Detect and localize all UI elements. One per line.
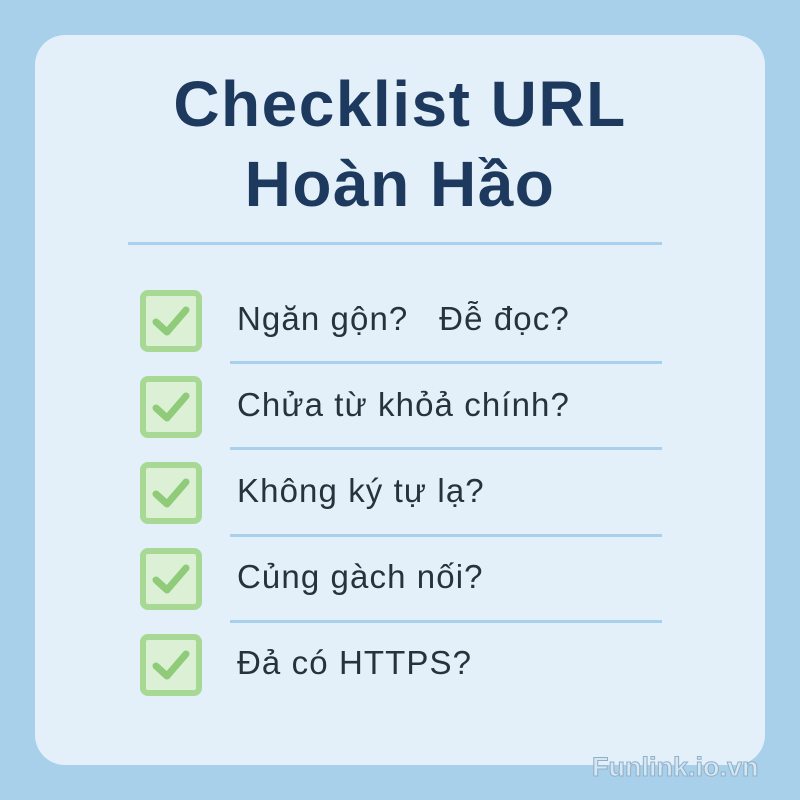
title: Hoàn Hầo (245, 148, 555, 220)
item 2: Chửa từ khỏả chính? (237, 386, 570, 423)
item 3 (140, 462, 485, 524)
title: Checklist URL (173, 68, 627, 140)
title (173, 68, 627, 220)
watermark: Funlink.io.vn (592, 752, 758, 782)
item 5: Đả có HTTPS? (237, 644, 472, 681)
item 3: Không ký tự lạ? (237, 472, 485, 509)
item 4 (140, 548, 484, 610)
item 4: Củng gàch nối? (237, 558, 484, 595)
item 5 (140, 634, 472, 696)
item 1 (140, 290, 570, 352)
item 1: Ngăn gộn? Đễ đọc? (237, 300, 570, 337)
item 2 (140, 376, 570, 438)
